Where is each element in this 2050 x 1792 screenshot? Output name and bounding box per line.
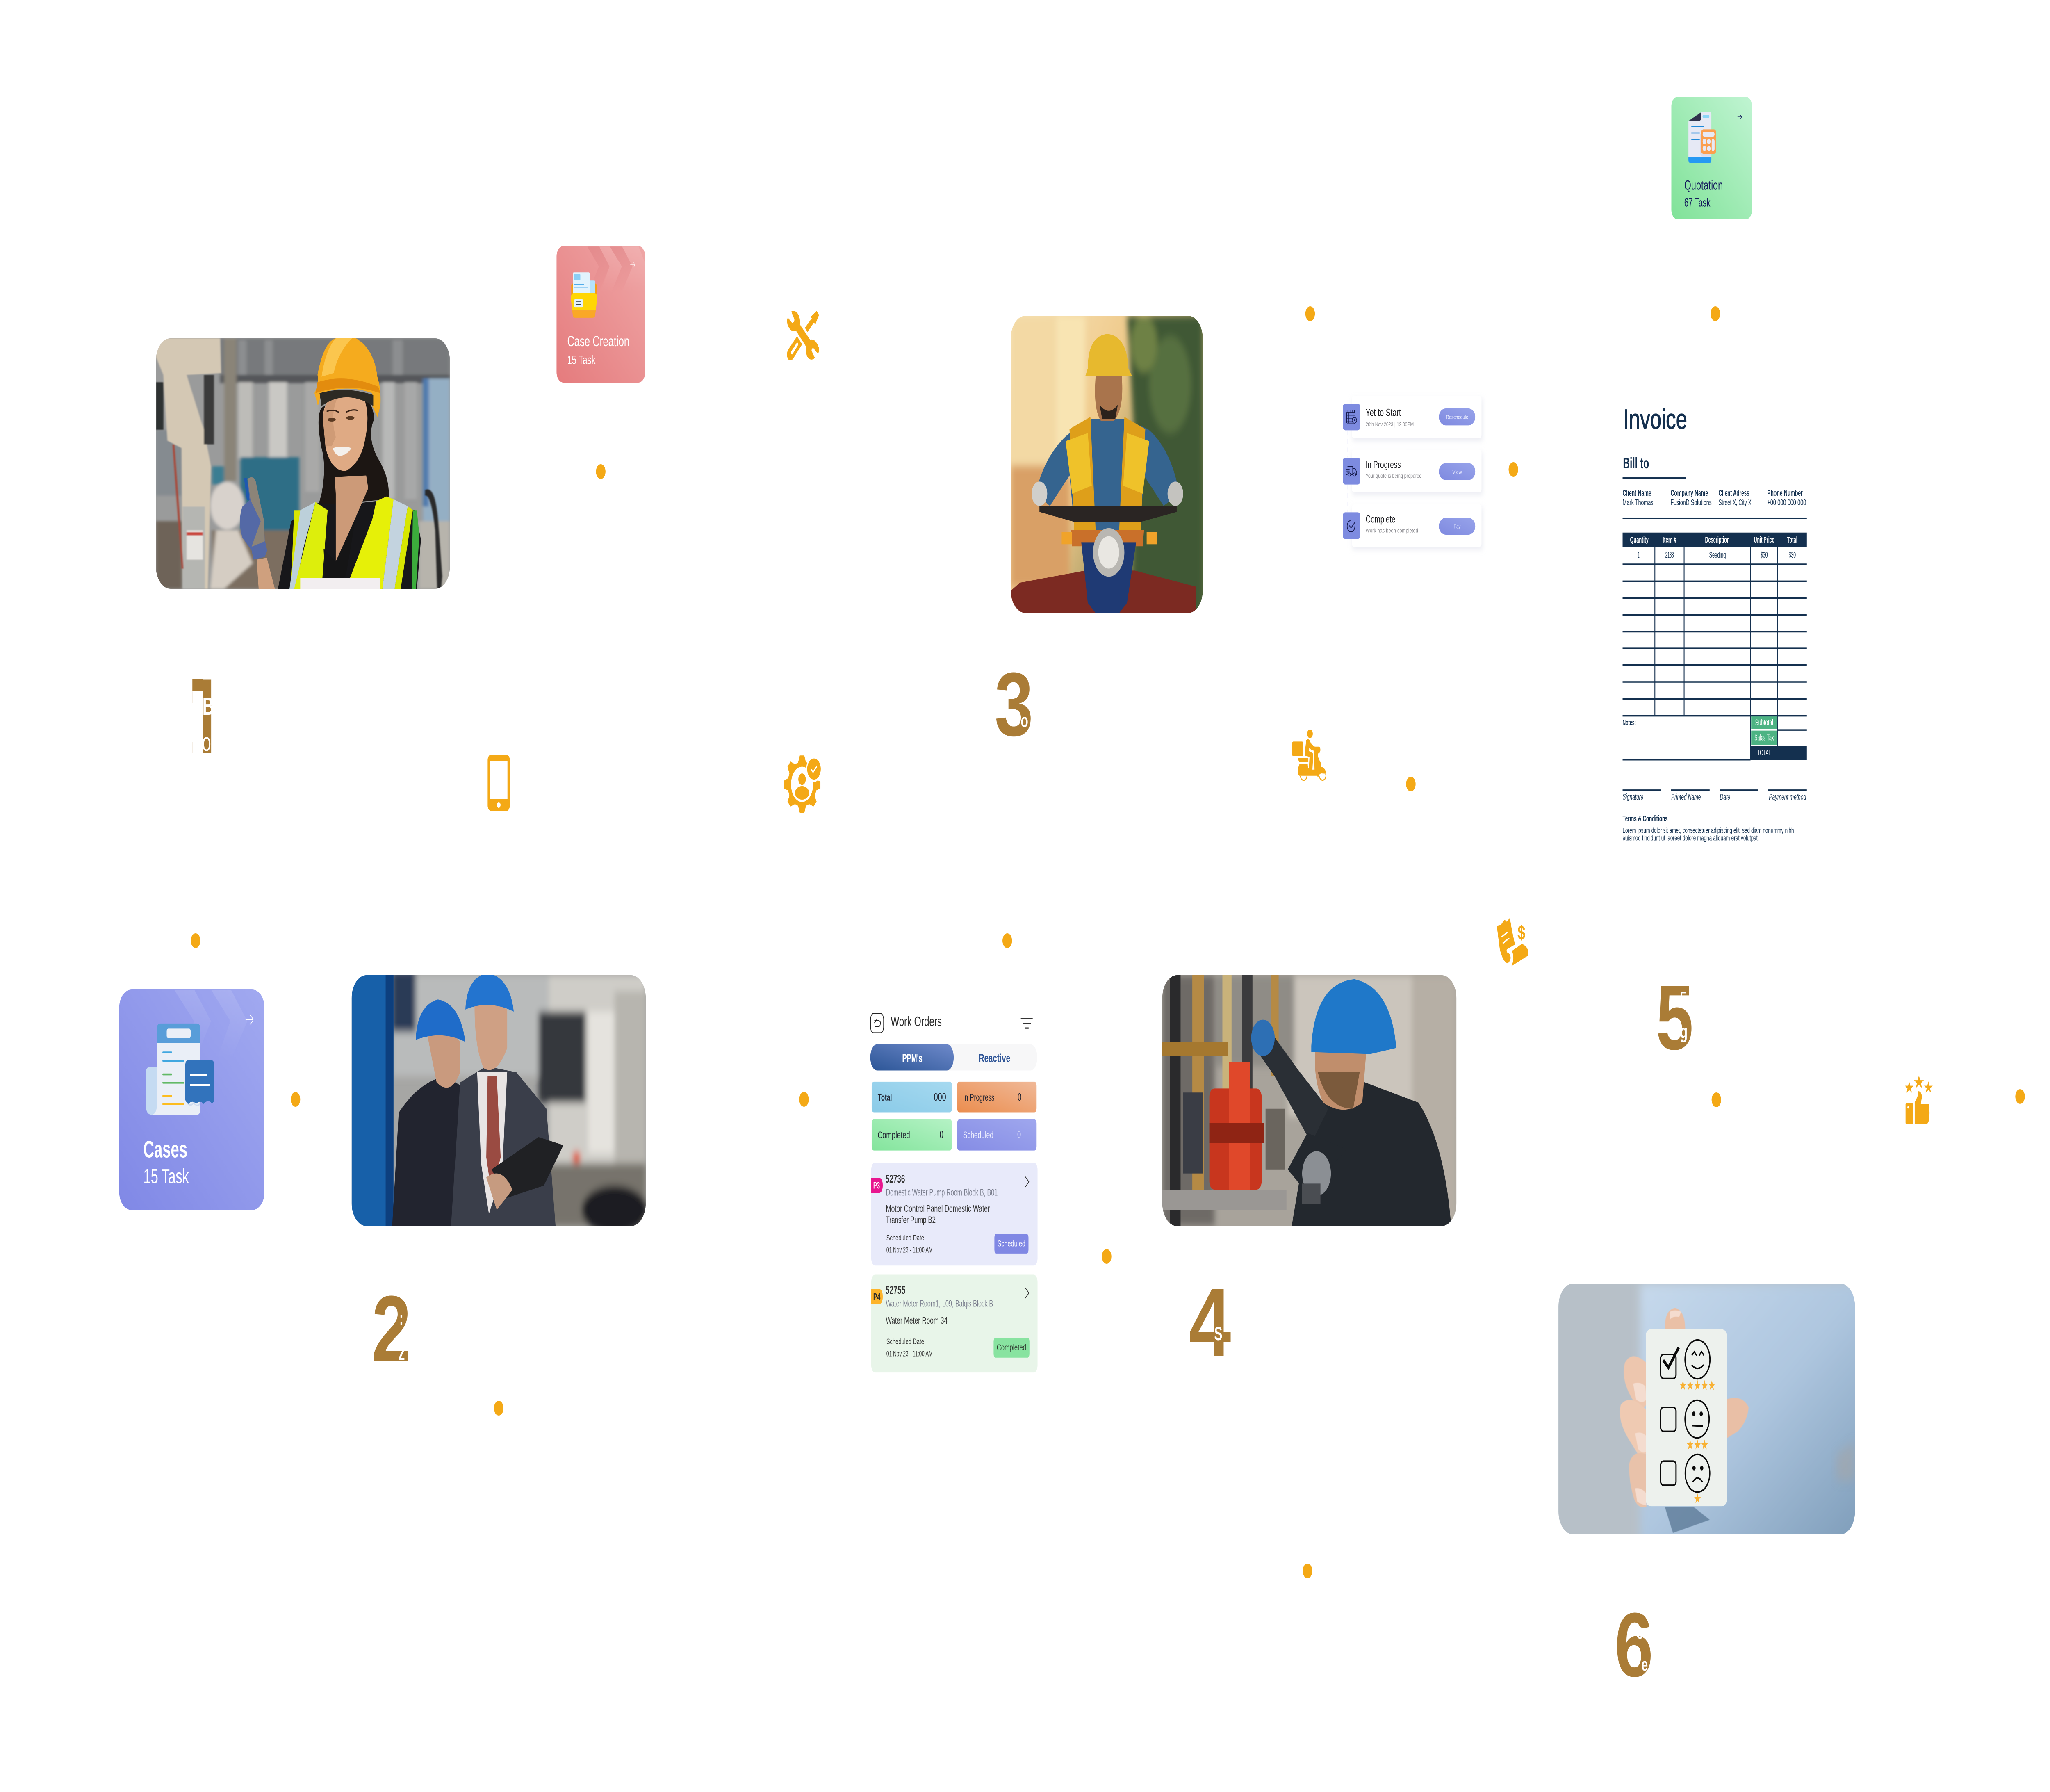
digit 1: o bbox=[202, 728, 211, 757]
work order card 52755: Scheduled Date bbox=[886, 1338, 924, 1346]
digit 3: 3 bbox=[995, 654, 1033, 755]
work order card 52755: Water Meter Room 34 bbox=[886, 1315, 948, 1326]
status tiles: 000 bbox=[934, 1092, 946, 1103]
header: Work Orders bbox=[891, 1014, 942, 1029]
invoice table: Subtotal bbox=[1755, 718, 1773, 727]
digit 4: 4 bbox=[1189, 1269, 1231, 1377]
digit 5: F bbox=[1680, 989, 1686, 1005]
invoice table: Total bbox=[1787, 536, 1797, 545]
client details: FusionD Solutions bbox=[1671, 497, 1712, 507]
tabs: PPM's bbox=[902, 1051, 922, 1065]
photo 6: hand holding customer feedback card bbox=[1558, 1284, 1865, 1545]
card: cases bbox=[119, 989, 264, 1210]
arrow bbox=[1738, 114, 1742, 119]
arrow bbox=[246, 1015, 253, 1024]
status tiles: 0 bbox=[1017, 1129, 1021, 1141]
signature lines bbox=[1623, 790, 1807, 802]
icon: gear with person and check bbox=[784, 755, 822, 813]
terms and conditions: euismod tincidunt ut laoreet dolore magna aliquam erat volutpat. bbox=[1623, 834, 1759, 842]
card: case creation bbox=[556, 246, 645, 383]
terms and conditions bbox=[1623, 815, 1794, 842]
status tiles: Scheduled bbox=[963, 1129, 993, 1140]
client details: Client Name bbox=[1623, 488, 1651, 498]
status card: in progress: Your quote is being prepared bbox=[1366, 473, 1422, 479]
invoice title: Invoice bbox=[1623, 404, 1687, 435]
status card: yet to start: 20th Nov 2023 | 12.00PM bbox=[1366, 421, 1414, 428]
card: cases: 15 Task bbox=[144, 1165, 189, 1188]
status tiles: In Progress bbox=[963, 1092, 994, 1103]
card: case creation: 15 Task bbox=[567, 353, 596, 367]
terms and conditions: Lorem ipsum dolor sit amet, consectetuer adipiscing elit, sed diam nonummy nibh bbox=[1623, 827, 1794, 835]
icon: document with calculator bbox=[1688, 112, 1716, 163]
status card: complete: Complete bbox=[1366, 513, 1396, 525]
client details: Street X, City X bbox=[1719, 497, 1752, 507]
card: quotation: 67 Task bbox=[1684, 196, 1711, 209]
work order card 52755: Completed bbox=[997, 1342, 1026, 1352]
bill to heading: Bill to bbox=[1623, 455, 1649, 472]
terms and conditions: Terms & Conditions bbox=[1623, 815, 1668, 823]
photo 1: woman engineer with yellow hard hat giving thumbs up bbox=[156, 338, 450, 589]
status card: complete bbox=[1343, 504, 1481, 547]
digit 3: o bbox=[1021, 711, 1028, 732]
status card: in progress: In Progress bbox=[1366, 459, 1401, 470]
digit 6: 6 bbox=[1615, 1594, 1653, 1696]
work order card 52736: 01 Nov 23 - 11:00 AM bbox=[886, 1246, 933, 1254]
invoice table: Quantity bbox=[1630, 536, 1649, 545]
icon: wrench and screwdriver bbox=[787, 311, 819, 360]
signature lines: Signature bbox=[1623, 793, 1643, 802]
work order card 52755: 52755 bbox=[886, 1284, 906, 1296]
status card: in progress: View bbox=[1452, 469, 1462, 475]
photo 3: delivery rider on scooter bbox=[1011, 316, 1203, 613]
icon: receipt and money hand bbox=[1497, 918, 1528, 966]
icon: folder with documents bbox=[571, 272, 597, 318]
work order card 52736 bbox=[871, 1163, 1038, 1265]
invoice table: Sales Tax bbox=[1754, 734, 1774, 742]
panel: work orders mobile screen bbox=[870, 1013, 1038, 1372]
client details: Phone Number bbox=[1767, 488, 1803, 498]
signature lines: Payment method bbox=[1769, 793, 1806, 802]
invoice table: Description bbox=[1705, 536, 1729, 545]
invoice table: 1 bbox=[1638, 551, 1640, 560]
work order card 52755: 01 Nov 23 - 11:00 AM bbox=[886, 1350, 933, 1359]
client details: +00 000 000 000 bbox=[1767, 497, 1806, 507]
digit 2: 2 bbox=[372, 1277, 411, 1382]
status card: complete: Pay bbox=[1454, 523, 1461, 530]
invoice table: TOTAL bbox=[1757, 749, 1771, 757]
work order card 52736: Scheduled Date bbox=[886, 1234, 924, 1243]
client details bbox=[1623, 488, 1806, 507]
digit 4: S bbox=[1214, 1324, 1222, 1345]
photo 2: engineers in blue hard hats reviewing a tablet bbox=[352, 971, 647, 1234]
digit 2: z bbox=[398, 1341, 405, 1364]
status card: complete: Work has been completed bbox=[1366, 527, 1418, 534]
card: quotation bbox=[1671, 97, 1752, 219]
work order card 52755: P4 bbox=[873, 1291, 881, 1302]
signature lines: Printed Name bbox=[1671, 793, 1701, 802]
client details: Mark Thomas bbox=[1623, 497, 1654, 507]
work order card 52755: Water Meter Room1, L09, Balqis Block B bbox=[886, 1298, 993, 1309]
card: cases: Cases bbox=[144, 1136, 187, 1163]
status tiles: 0 bbox=[940, 1129, 943, 1141]
status tiles: 0 bbox=[1018, 1092, 1021, 1103]
arrow bbox=[630, 262, 635, 268]
status tiles bbox=[872, 1082, 1036, 1151]
icon: smartphone bbox=[487, 755, 510, 811]
panel: status timeline bbox=[1343, 396, 1483, 550]
work order card 52736: Transfer Pump B2 bbox=[886, 1214, 936, 1225]
icon: thumbs up with stars bbox=[1905, 1076, 1933, 1124]
work order card 52736: Motor Control Panel Domestic Water bbox=[886, 1203, 990, 1214]
digit 6: c bbox=[1636, 1620, 1644, 1644]
digit 1: 1 bbox=[188, 657, 223, 776]
work order card 52755 bbox=[871, 1275, 1038, 1372]
invoice table: 2138 bbox=[1665, 551, 1674, 560]
invoice table bbox=[1623, 533, 1807, 760]
status tiles: Completed bbox=[877, 1129, 910, 1140]
digit 6: e bbox=[1641, 1654, 1648, 1675]
invoice table: Notes: bbox=[1623, 718, 1636, 727]
card: case creation: Case Creation bbox=[567, 333, 629, 349]
photo 4: technician in blue hard hat repairing pipes bbox=[1162, 975, 1456, 1226]
invoice table: $30 bbox=[1761, 551, 1768, 560]
status card: yet to start: Yet to Start bbox=[1366, 407, 1401, 418]
signature lines: Date bbox=[1720, 793, 1730, 802]
status card: yet to start: Reschedule bbox=[1446, 414, 1468, 420]
status tiles: Total bbox=[878, 1092, 892, 1103]
icon: scooter delivery rider bbox=[1292, 730, 1326, 780]
work order card 52736: Scheduled bbox=[998, 1238, 1025, 1249]
work order card 52736: P3 bbox=[873, 1180, 880, 1191]
status card: in progress bbox=[1343, 450, 1481, 492]
client details: Company Name bbox=[1671, 488, 1708, 498]
tabs bbox=[870, 1044, 1037, 1070]
digit 5: g bbox=[1680, 1020, 1688, 1043]
icon: document with receipt bbox=[146, 1024, 214, 1115]
hand bbox=[1620, 1308, 1749, 1533]
status card: yet to start bbox=[1343, 396, 1481, 438]
invoice table: $30 bbox=[1789, 551, 1796, 560]
client details: Client Adress bbox=[1719, 488, 1749, 498]
digit 5: 5 bbox=[1656, 966, 1693, 1069]
tabs: Reactive bbox=[979, 1051, 1010, 1065]
feedback card bbox=[1646, 1329, 1727, 1506]
work order card 52736: 52736 bbox=[886, 1173, 905, 1185]
woman figure bbox=[240, 338, 421, 589]
invoice table: Unit Price bbox=[1754, 536, 1774, 545]
digit 1: B bbox=[203, 692, 214, 720]
invoice table: Item # bbox=[1663, 536, 1676, 545]
card: quotation: Quotation bbox=[1684, 178, 1723, 192]
invoice table: Seeding bbox=[1709, 551, 1726, 560]
header bbox=[870, 1013, 1033, 1033]
work order card 52736: Domestic Water Pump Room Block B, B01 bbox=[886, 1187, 998, 1197]
digit 2: : bbox=[399, 1308, 403, 1329]
invoice document bbox=[1623, 404, 1807, 842]
